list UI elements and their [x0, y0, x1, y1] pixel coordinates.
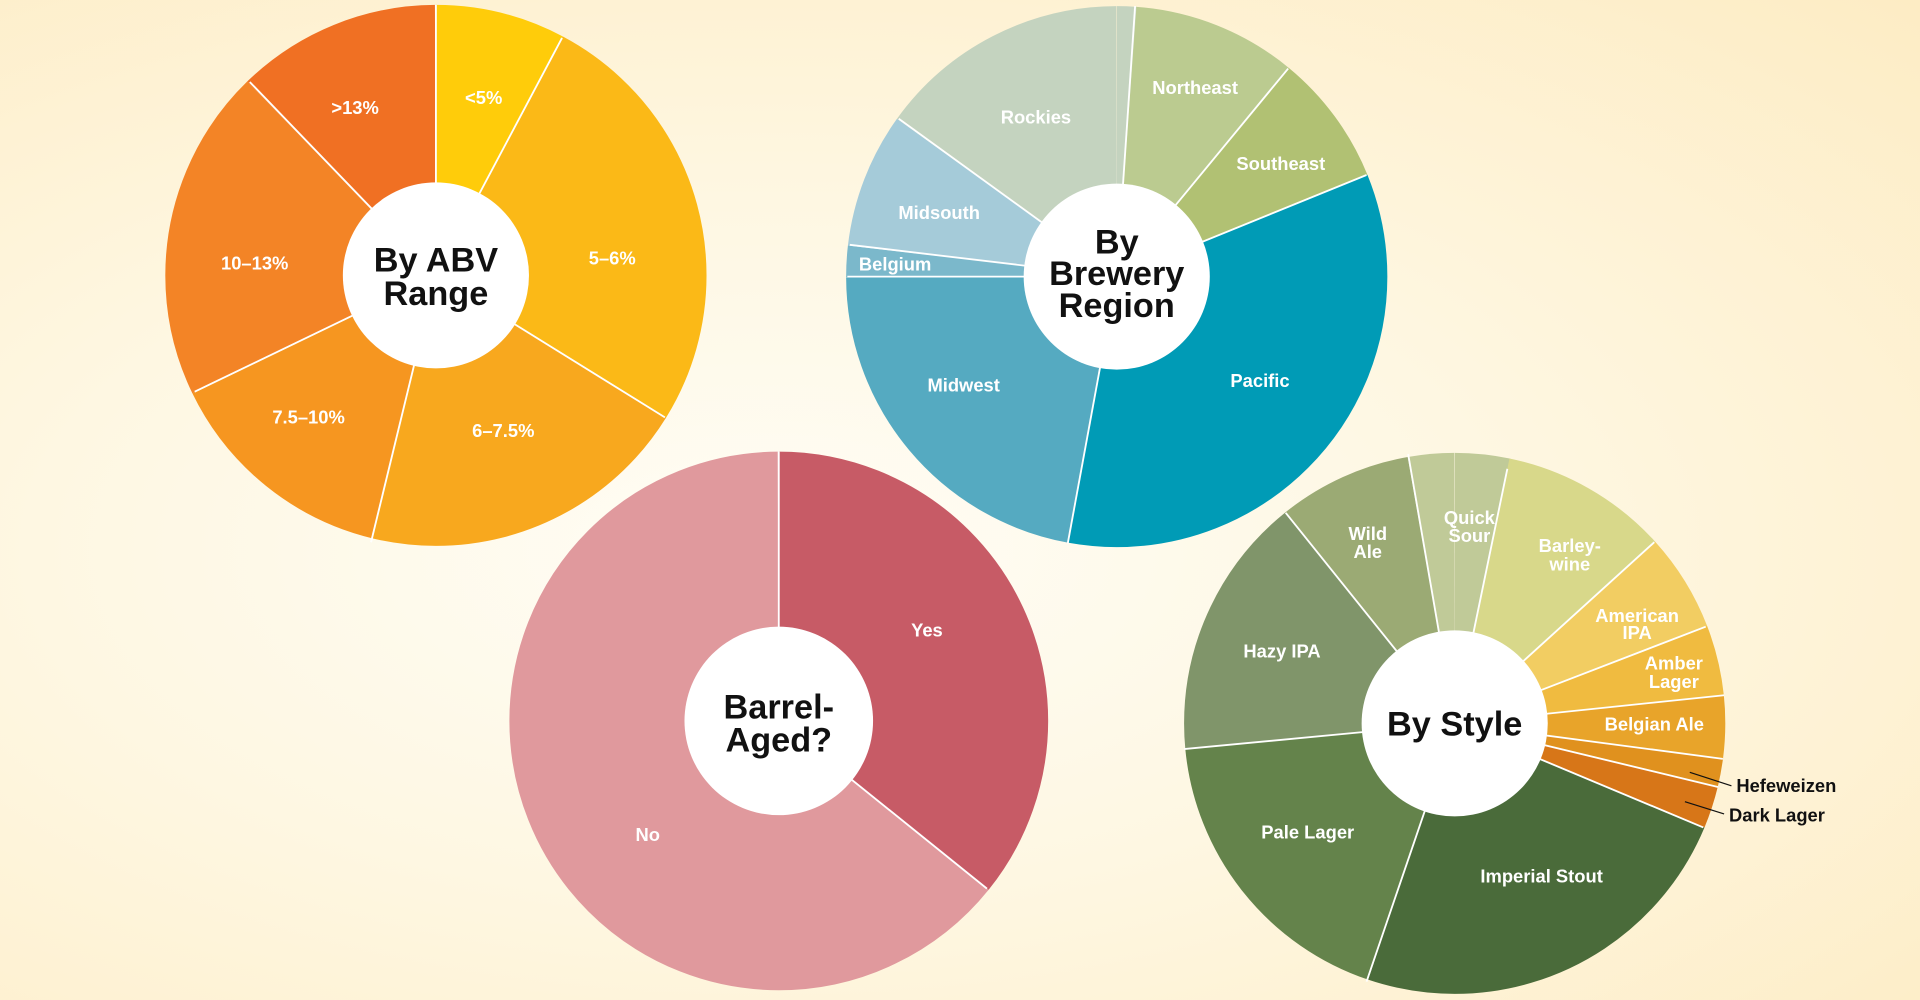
pie: by style: Imperial Stout — [1480, 866, 1603, 886]
pie: by style: By Style — [1387, 706, 1522, 744]
pie: by style: Wild — [1348, 523, 1387, 544]
pie: by style: Pale Lager — [1261, 821, 1354, 842]
pie: ABV range: By ABV — [374, 242, 498, 280]
pie: by style: American — [1595, 605, 1679, 626]
pie: barrel-aged: Yes — [911, 619, 943, 640]
callout: Hefeweizen — [1690, 772, 1836, 796]
pie: by style — [1184, 454, 1724, 982]
pie: barrel-aged: Barrel- — [724, 688, 834, 726]
pie: ABV range — [195, 5, 665, 542]
pie: brewery region: Brewery — [1049, 255, 1184, 293]
pie: by style: Barley- — [1539, 535, 1601, 556]
pie: by style: Quick — [1444, 507, 1496, 528]
pie: barrel-aged — [636, 452, 987, 889]
callout: Dark Lager — [1685, 802, 1825, 825]
pie: ABV range: Range — [384, 275, 488, 313]
pie: ABV range: 5–6% — [589, 247, 636, 268]
pie: ABV range: 7.5–10% — [272, 407, 345, 427]
pie: ABV range: 10–13% — [221, 252, 288, 273]
pie: by style: Belgian Ale — [1605, 714, 1704, 735]
pie: by style: Hazy IPA — [1243, 640, 1321, 661]
pie: brewery region: Rockies — [1001, 107, 1071, 128]
pie: by style: Lager — [1649, 671, 1699, 692]
pie: brewery region — [847, 6, 1367, 543]
pie: by style: Ale — [1353, 541, 1382, 562]
pie: brewery region: Belgium — [859, 254, 931, 275]
pie: ABV range: 6–7.5% — [472, 420, 534, 441]
pie: barrel-aged: Aged? — [725, 722, 832, 760]
pie: ABV range: >13% — [331, 97, 379, 118]
pie: by style: IPA — [1623, 622, 1652, 643]
pie: by style: Sour — [1448, 525, 1490, 546]
pie: brewery region: By — [1095, 223, 1139, 261]
pie: brewery region: Midwest — [927, 375, 1000, 396]
pie: brewery region: Region — [1059, 287, 1175, 325]
pie: by style: wine — [1548, 553, 1590, 574]
pie: brewery region: Pacific — [1230, 370, 1290, 391]
pie: by style: Amber — [1645, 653, 1703, 674]
callout: Dark Lager: Dark Lager — [1729, 804, 1825, 825]
pie: brewery region: Northeast — [1152, 77, 1238, 98]
callout: Hefeweizen: Hefeweizen — [1736, 775, 1836, 796]
pie: ABV range: <5% — [465, 87, 502, 108]
pie: barrel-aged: No — [636, 824, 660, 845]
pie: brewery region: Southeast — [1236, 153, 1325, 174]
pie: brewery region: Midsouth — [898, 202, 980, 223]
